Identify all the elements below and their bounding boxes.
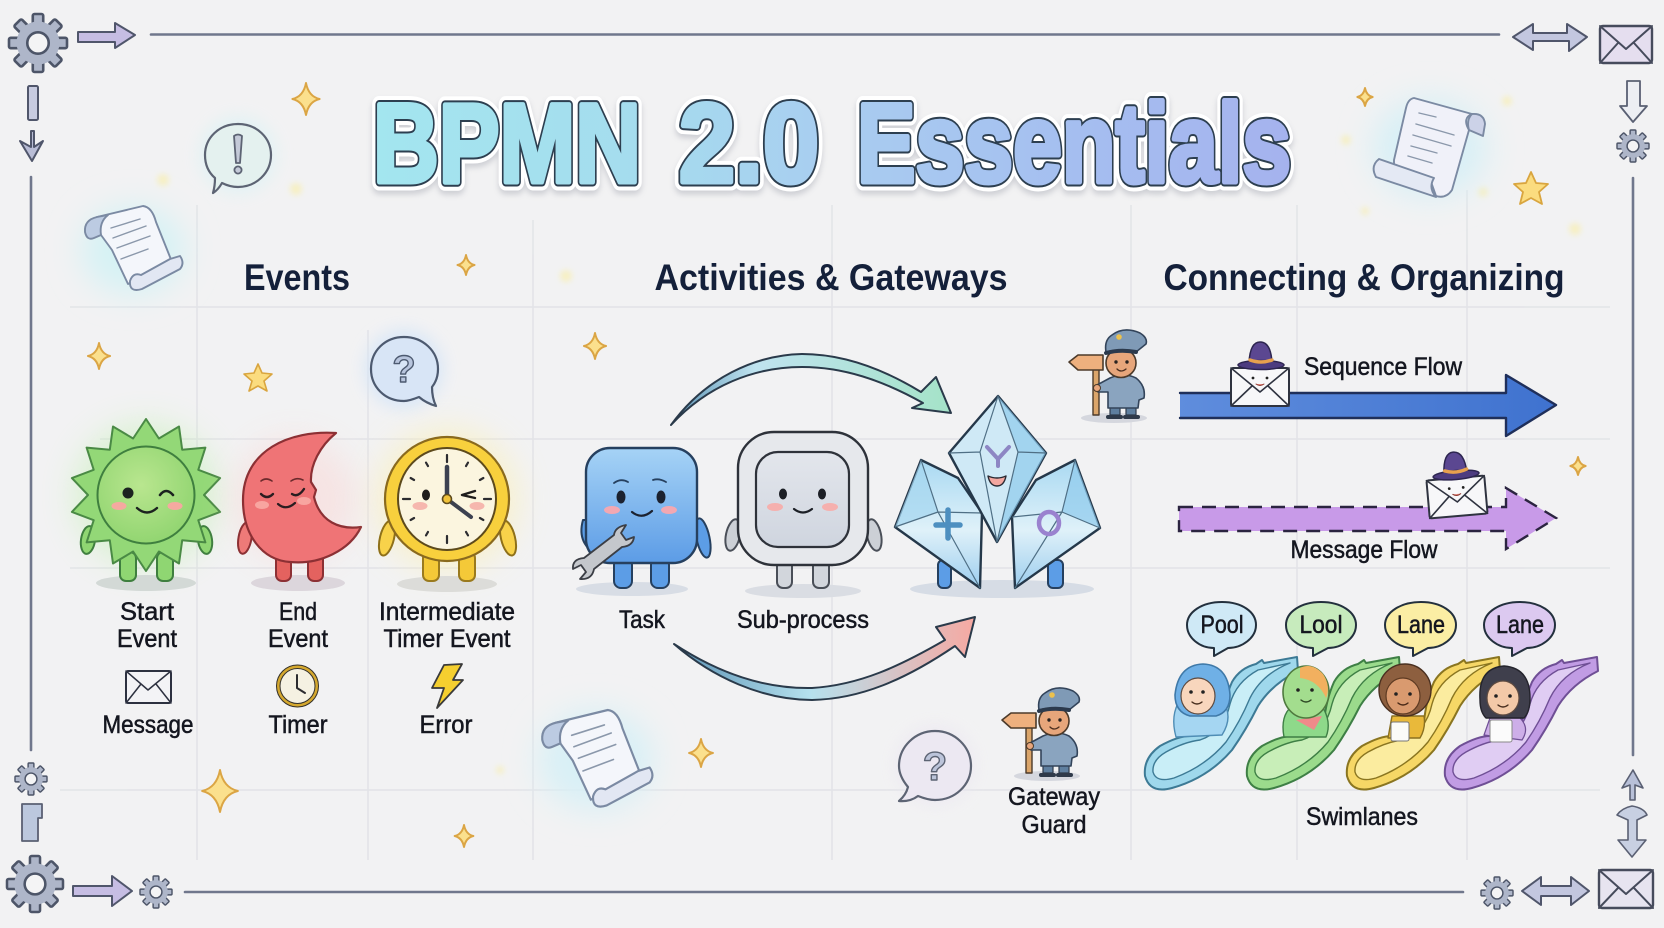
speech bubble: Pool [1187,602,1256,656]
speech bubble: Lane purple: Lane [1496,611,1544,639]
icon: exclamation speech bubble [199,116,277,194]
character: start event sun [72,419,220,591]
character: gateway guard bottom [1002,688,1080,781]
corner bottom right: gear, arrows and envelope [1481,770,1653,909]
character: gateway crystals [895,396,1100,598]
title: Essentials [857,81,1291,206]
speech bubble: Lool: Lool [1300,611,1342,639]
label: Start Event: Event [117,625,177,653]
swimlane: yellow slide with character [1347,657,1500,790]
title: BPMN [373,85,641,210]
label: Gateway Guard: Guard [1022,811,1086,839]
title: 2.0 [679,81,819,206]
title [373,81,1291,210]
corner bottom left: gears and arrow [7,763,172,912]
swimlane: blue slide with character [1145,657,1298,790]
character: intermediate timer clock [376,429,519,592]
swimlane: purple slide with character [1445,657,1598,790]
speech bubble: Pool: Pool [1200,611,1244,639]
envelope with hat on message flow [1424,450,1488,518]
label: Intermediate Timer Event: Intermediate [379,598,515,626]
background grid [60,190,1610,860]
title: BPMN [373,81,641,206]
label: Start Event [117,598,177,653]
arrow: top curved flow to gateway [671,354,951,425]
label: End Event: End [279,598,317,626]
character: task [573,448,714,596]
icon: question speech bubble near clock [364,329,444,409]
title: 2.0 [679,85,819,210]
question bubble near guard: ? [923,745,947,789]
label: Message Flow: Message Flow [1290,536,1438,564]
label: Intermediate Timer Event [379,598,515,653]
heading: Events: Events [244,257,350,298]
corner top left: gear and arrows [9,14,135,161]
question bubble near guard [895,725,975,805]
label: Error: Error [420,711,472,739]
title: BPMN [373,81,641,206]
arrow: sequence flow [1180,375,1556,436]
label: Message: Message [102,711,194,739]
title: Essentials [857,85,1291,210]
label: Intermediate Timer Event: Timer Event [384,625,511,653]
swimlane: green slide with character [1247,657,1400,790]
heading: Connecting & Organizing: Connecting & Organizing [1164,257,1564,298]
speech bubble: Lane yellow: Lane [1397,611,1445,639]
label: Task: Task [619,606,665,634]
title: Essentials [857,81,1291,206]
label: Start Event: Start [120,598,174,626]
title: 2.0 [679,81,819,206]
speech bubble: Lane yellow [1385,602,1456,656]
character: end event moon [233,433,361,591]
icon: scroll top right [1372,98,1488,198]
label: End Event: Event [268,625,328,653]
title: 2.0 [679,81,819,206]
icon: message envelope [126,671,171,703]
label: Timer: Timer [268,711,328,739]
arrow: bottom curved flow to gateway [674,617,975,700]
icon: question speech bubble near clock: ? [392,349,416,391]
label: Sequence Flow: Sequence Flow [1304,353,1463,381]
arrow: message flow [1179,488,1556,549]
character: gateway guard top [1069,330,1147,423]
heading: Activities & Gateways: Activities & Gateways [654,257,1008,298]
label: End Event [268,598,328,653]
icon: scroll top left [81,206,185,294]
corner top right: arrow and envelope [1513,24,1652,162]
speech bubble: Lool [1286,602,1356,656]
icon: error lightning bolt [432,664,463,708]
label: Sub-process: Sub-process [737,606,869,634]
character: sub-process [723,432,884,598]
title: Essentials [857,81,1291,206]
stars [88,83,1586,847]
label: Swimlanes: Swimlanes [1306,803,1418,831]
envelope with hat on sequence flow [1231,342,1289,406]
title: BPMN [373,81,641,206]
speech bubble: Lane purple [1484,602,1555,656]
icon: timer clock [276,665,318,707]
decorative glows [157,96,1581,774]
label: Gateway Guard [1008,783,1100,839]
icon: scroll bottom centre [538,710,654,810]
label: Gateway Guard: Gateway [1008,783,1100,811]
